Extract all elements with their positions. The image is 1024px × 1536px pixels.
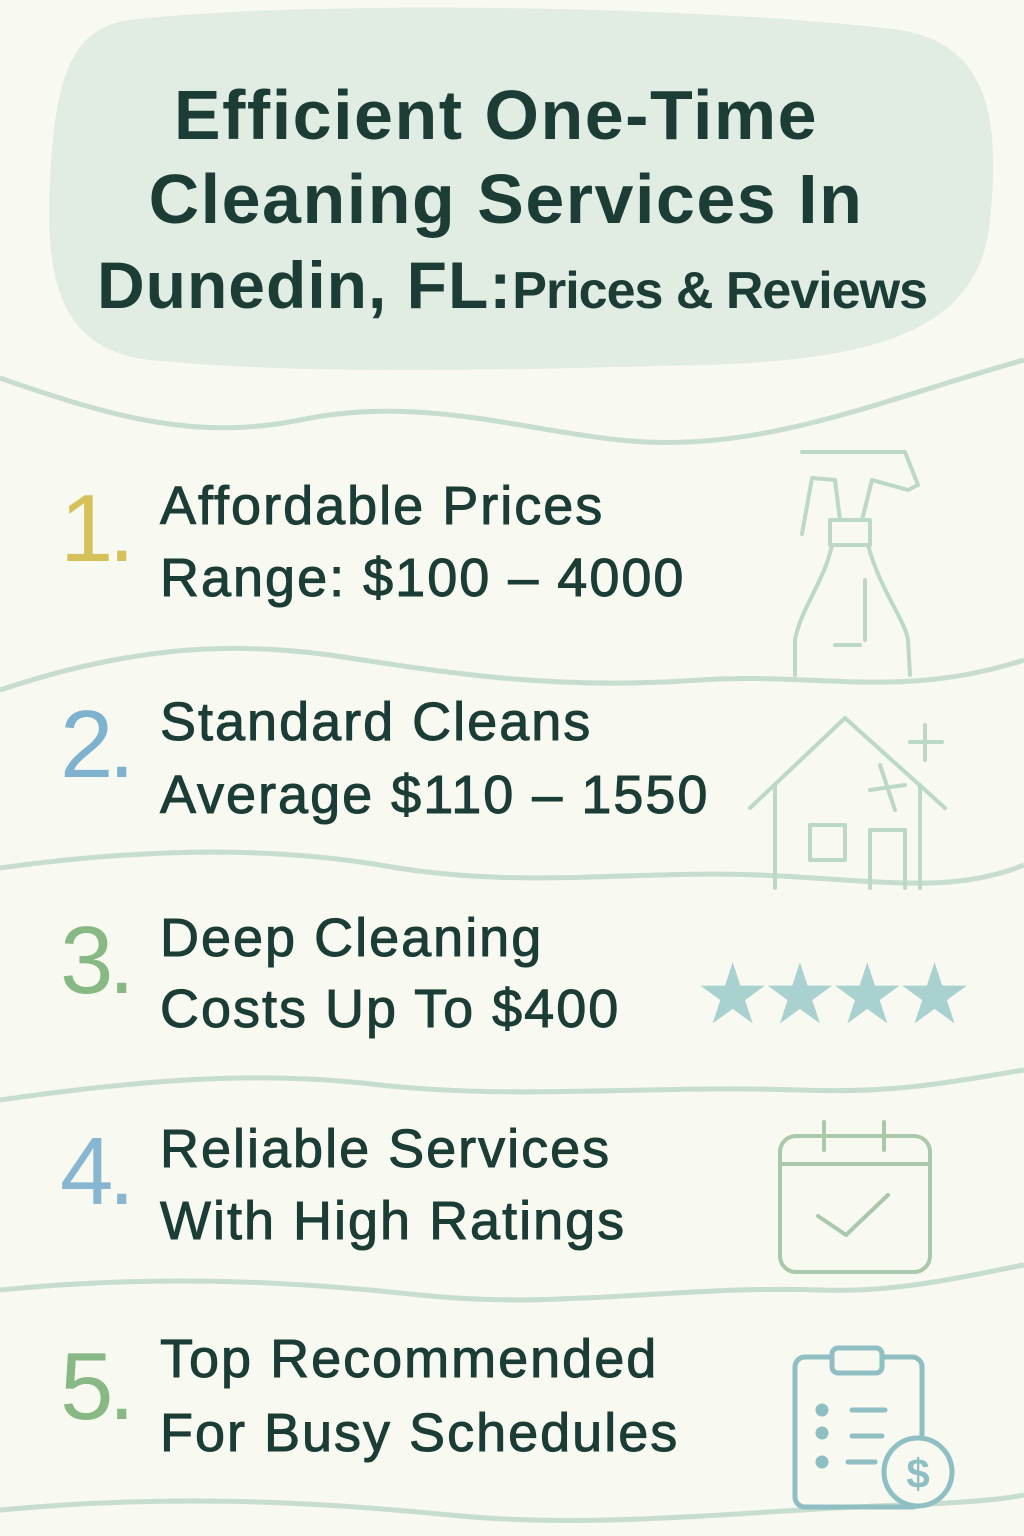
item 3: Deep Cleaning <box>160 908 543 968</box>
item 1: Range: $100 – 4000 <box>160 548 685 608</box>
item 5: For Busy Schedules <box>160 1403 679 1463</box>
item 4: Reliable Services <box>160 1119 611 1179</box>
icon: stars: ★★★★ <box>695 947 964 1041</box>
title: Cleaning Services In <box>149 160 863 238</box>
title bubble <box>49 8 993 370</box>
title <box>97 76 927 322</box>
item 1: Affordable Prices <box>160 476 604 536</box>
item 5 <box>60 1329 679 1463</box>
item 2: Standard Cleans <box>160 692 592 752</box>
item 1 <box>60 475 685 608</box>
item 1: 1. <box>60 475 130 582</box>
title: Efficient One-Time <box>174 76 818 154</box>
item 4 <box>60 1118 626 1251</box>
item 4: With High Ratings <box>160 1191 626 1251</box>
item 3: 3. <box>60 907 130 1014</box>
item 3 <box>60 907 620 1039</box>
item 2: 2. <box>60 691 130 798</box>
item 4: 4. <box>60 1118 130 1225</box>
item 5: 5. <box>60 1333 130 1440</box>
item 2 <box>60 691 709 825</box>
icon: clipboard with dollar: $ <box>906 1450 930 1497</box>
item 5: Top Recommended <box>160 1329 658 1389</box>
title: Dunedin, FL:Prices & Reviews <box>97 248 927 322</box>
item 2: Average $110 – 1550 <box>160 765 709 825</box>
item 3: Costs Up To $400 <box>160 979 620 1039</box>
